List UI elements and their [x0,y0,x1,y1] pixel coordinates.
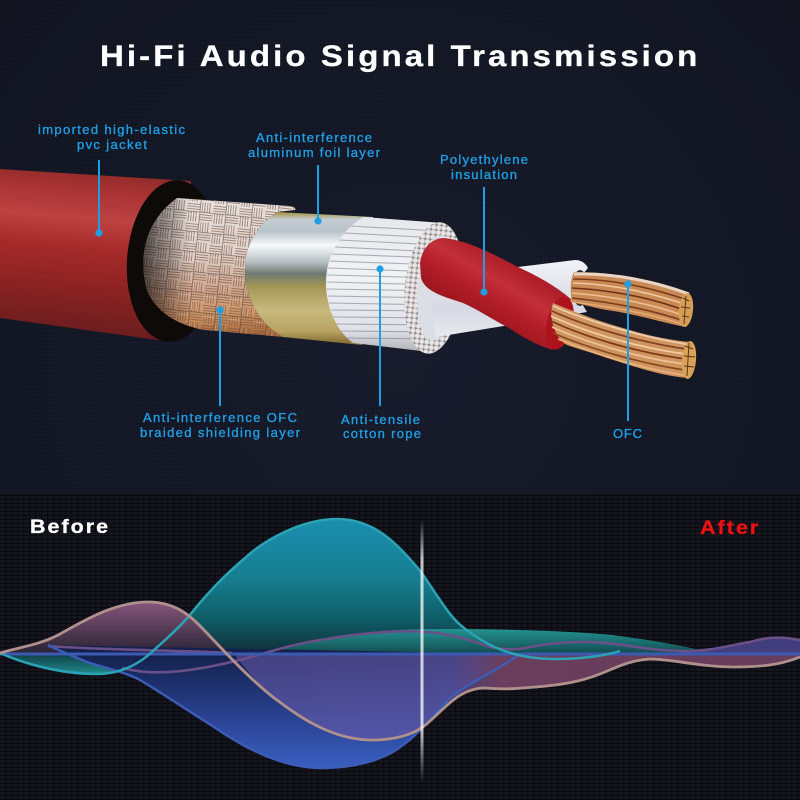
upper copper conductor [571,270,695,328]
mauve lower fill [234,654,800,740]
label: cotton rope [341,265,421,441]
right violet fill [680,638,800,654]
white inner sleeve [430,260,588,337]
label: polyethylene insulation [440,152,528,296]
label: polyethylene insulation: Polyethylene [440,152,528,167]
lower copper conductor [551,303,698,380]
divider line [420,520,424,782]
label: pvc jacket: imported high-elastic [38,122,186,137]
cable illustration [0,169,698,380]
aluminum foil [245,212,375,345]
label: braided shield: Anti-interference OFC [143,410,297,425]
label: braided shield [140,306,301,440]
pvc jacket [0,169,222,341]
before label: Before [30,516,108,538]
cotton rope [326,217,443,352]
blue line [48,645,520,768]
label: polyethylene insulation: insulation [451,167,517,182]
label: cotton rope: Anti-tensile [341,412,420,427]
label: OFC [613,280,642,441]
title: Hi-Fi Audio Signal Transmission [100,38,697,73]
baseline [0,652,800,656]
label: aluminum foil: aluminum foil layer [248,145,381,160]
label: aluminum foil [248,130,381,225]
label: aluminum foil: Anti-interference [256,130,372,145]
waveform chart [0,519,800,768]
blue lower fill [48,645,520,768]
label: braided shield: braided shielding layer [140,425,301,440]
flat teal fill [265,629,712,653]
copper braided shield [143,198,295,337]
label: pvc jacket [38,122,186,237]
mauve upper fill [0,602,234,653]
red polyethylene insulation [420,238,578,352]
purple lines [48,631,800,672]
teal line [0,519,620,674]
panel: before and after waveform [0,494,800,800]
beige line [0,602,800,740]
label: cotton rope: cotton rope [343,426,421,441]
label: OFC: OFC [613,426,642,441]
rope end ring [398,219,470,357]
teal lower lobe [0,653,153,674]
teal fill [153,519,478,653]
label: pvc jacket: pvc jacket [77,137,147,152]
after label: After [700,517,758,539]
black ring behind braid [121,177,225,345]
